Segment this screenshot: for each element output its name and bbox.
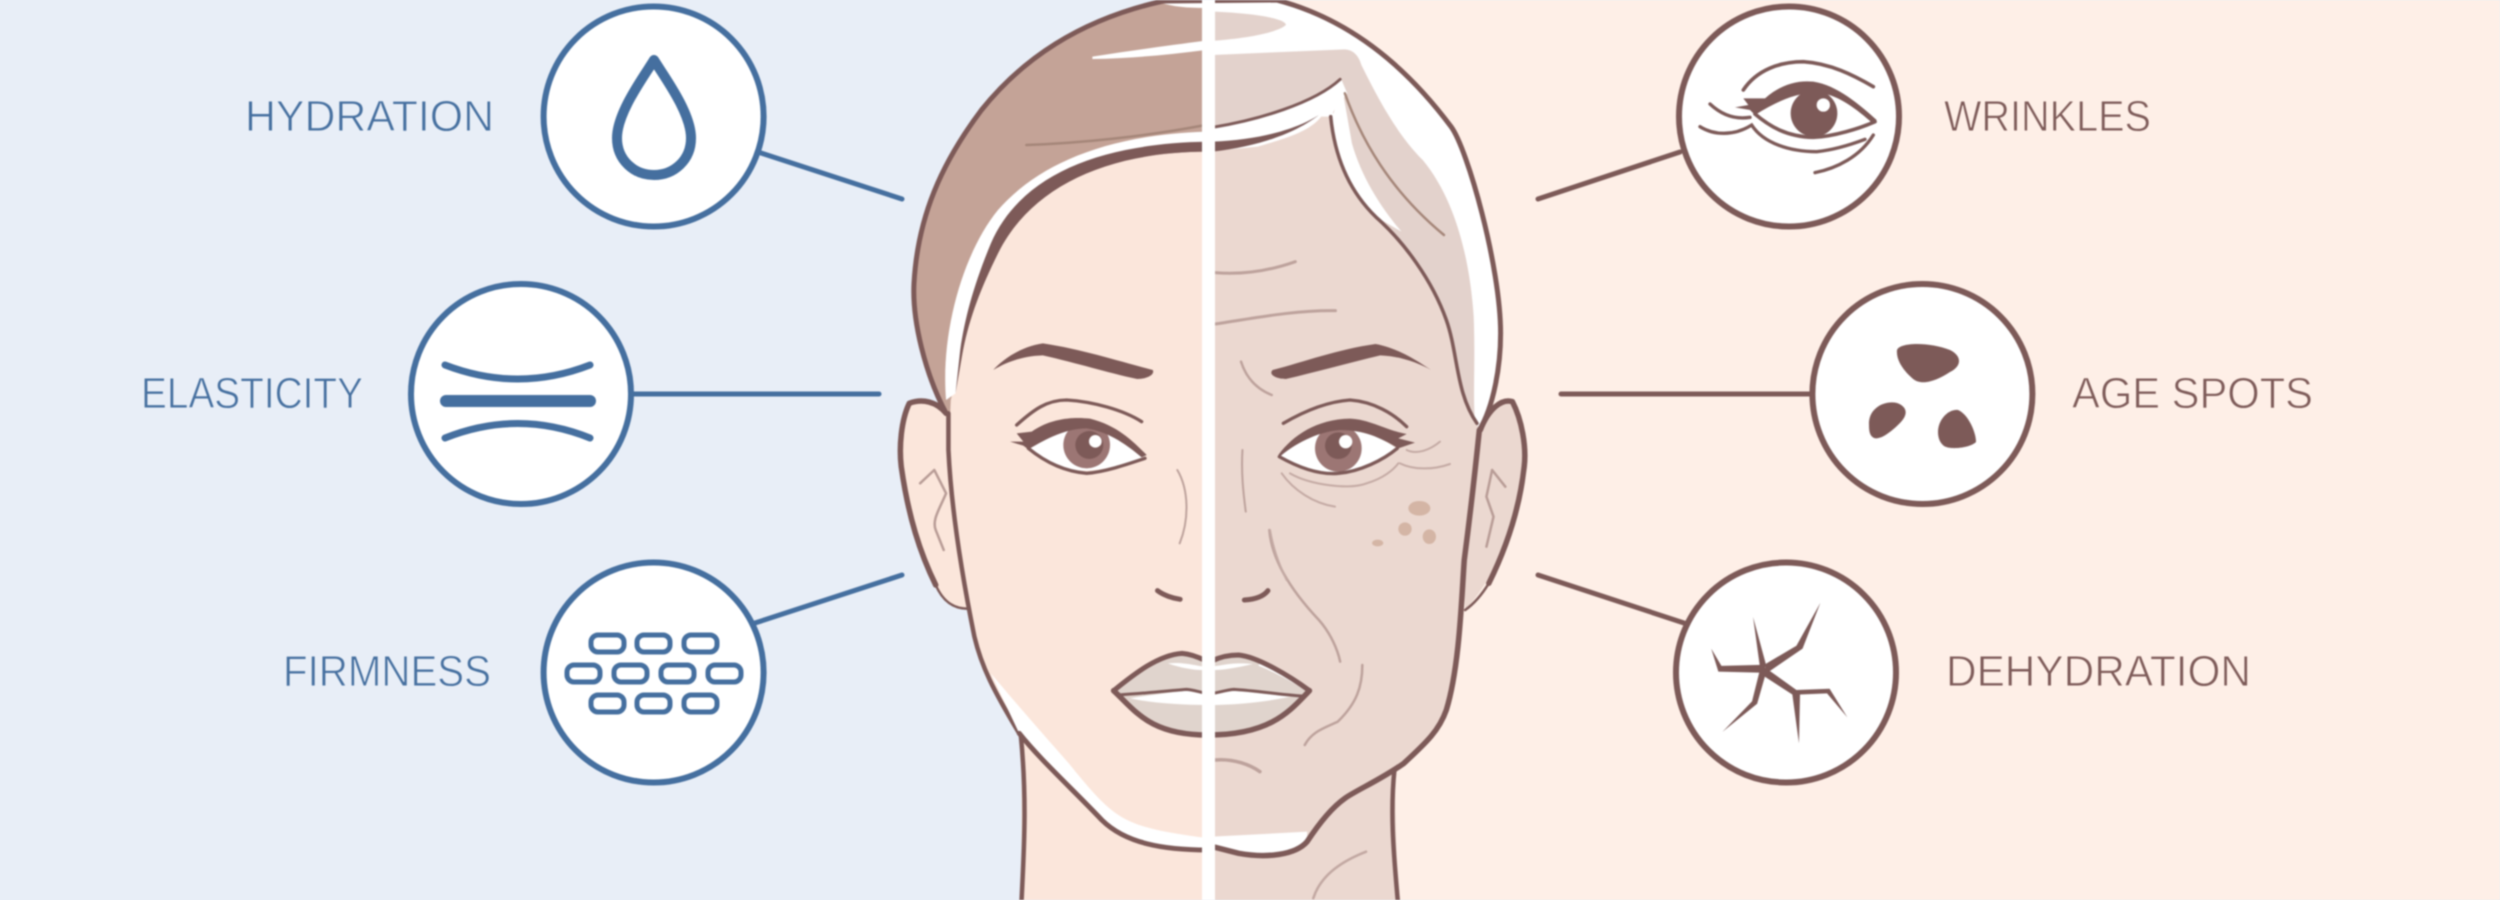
right hair xyxy=(1208,0,1501,433)
right face skin xyxy=(1208,117,1479,856)
jaw highlights and outline xyxy=(991,430,1479,856)
label: firmness: FIRMNESS xyxy=(283,647,491,696)
connector lines: right xyxy=(1538,152,1810,623)
right ear xyxy=(1460,401,1525,610)
icon: hydration drop xyxy=(544,6,764,226)
icon: wrinkles eye xyxy=(1679,6,1899,226)
panel: right peach background xyxy=(1209,0,2500,900)
icon: age spots xyxy=(1812,284,2032,504)
icon: firmness bricks xyxy=(544,562,764,782)
label: dehydration: DEHYDRATION xyxy=(1946,647,2251,696)
centre divider line xyxy=(1202,0,1215,900)
label: wrinkles: WRINKLES xyxy=(1944,92,2151,141)
right hairline band xyxy=(1213,90,1477,423)
left ear xyxy=(900,401,972,609)
icon: dehydration cracks xyxy=(1676,562,1896,782)
left face skin xyxy=(948,152,1208,850)
left eye xyxy=(1010,400,1147,473)
nostrils xyxy=(1158,591,1268,600)
icon: elasticity lines xyxy=(411,284,631,504)
right eyebrow xyxy=(1271,344,1431,379)
left hairline band xyxy=(945,132,1208,400)
label: age spots: AGE SPOTS xyxy=(2072,369,2313,418)
face illustration xyxy=(900,0,1525,900)
facial wrinkles xyxy=(1177,262,1362,772)
label: elasticity: ELASTICITY xyxy=(141,369,363,418)
lips xyxy=(1114,653,1309,735)
right eye with wrinkles and age spots xyxy=(1270,400,1450,580)
left eyebrow xyxy=(993,343,1153,379)
label: hydration: HYDRATION xyxy=(245,92,494,141)
connector lines: left xyxy=(633,153,902,623)
head outline xyxy=(914,0,1501,733)
panel: left blue background xyxy=(0,0,1209,900)
left hair xyxy=(914,0,1208,417)
neck xyxy=(1021,733,1398,900)
